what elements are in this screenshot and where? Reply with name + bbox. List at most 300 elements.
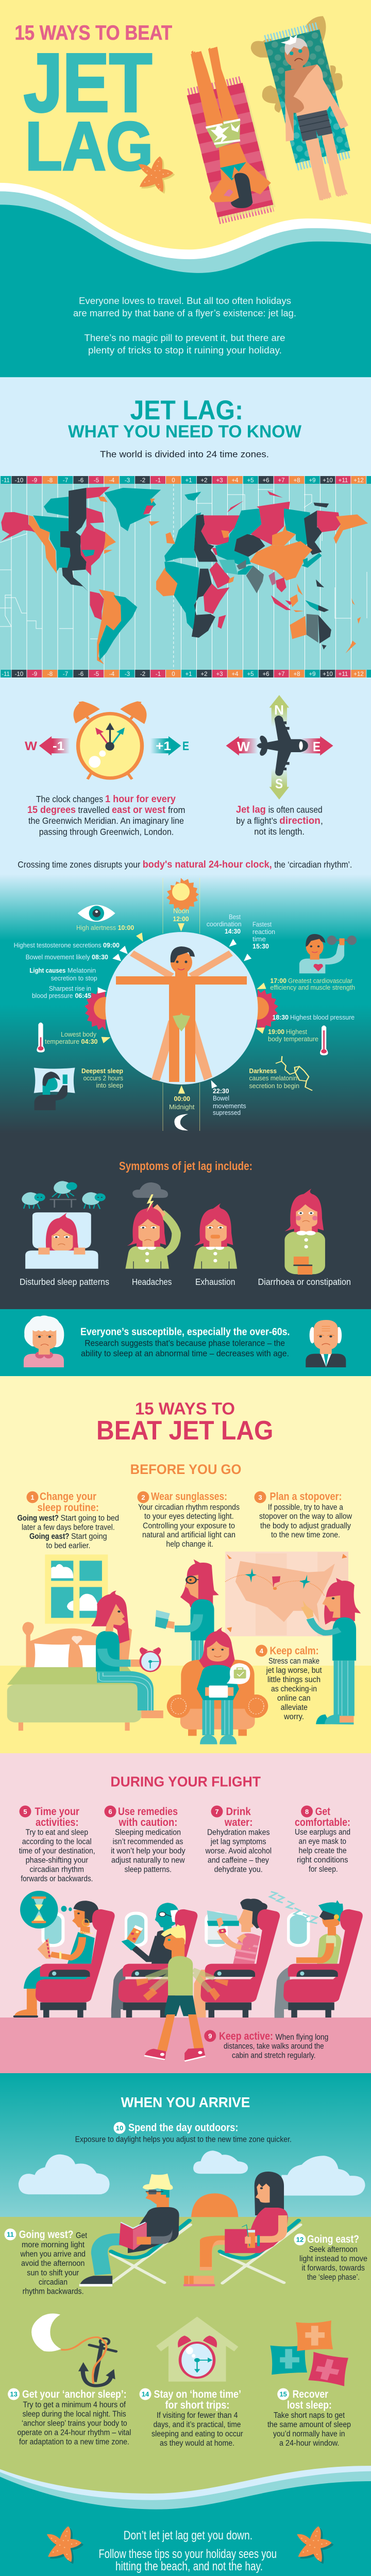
icon: moon xyxy=(174,1114,188,1130)
tip 7: jet lag symptoms xyxy=(210,1838,266,1846)
tip 15: the same amount of sleep xyxy=(267,2420,351,2429)
tip 5: time of your destination, xyxy=(19,1847,95,1856)
tip 12: the ‘sleep phase’. xyxy=(307,2273,360,2282)
figure: elderly woman xyxy=(24,1315,64,1367)
icon: noon sun xyxy=(166,878,199,931)
tip 15: Take short naps to get xyxy=(274,2411,345,2420)
time zone footer bar: -9 xyxy=(32,671,37,677)
heading: what you need to know: JET LAG: xyxy=(130,395,243,426)
diagram labels: causes melatonin xyxy=(249,1075,297,1082)
text: clock changes: the Greenwich Meridian. An imaginary line xyxy=(28,816,184,826)
figure: woman in armchair xyxy=(167,1627,268,1744)
diagram labels: 10:00 xyxy=(118,924,134,931)
text: everyone's susceptible: Research suggests that’s because phase tolerance – the xyxy=(85,1339,285,1348)
icon: melatonin molecule xyxy=(276,1056,312,1091)
tip 7: Drink xyxy=(226,1806,251,1818)
tip 14: If visiting for fewer than 4 xyxy=(157,2411,238,2420)
tip 15: Recover xyxy=(293,2388,328,2400)
tip 3: Plan a stopover: xyxy=(270,1491,342,1503)
tip 1: Going east? xyxy=(29,1532,69,1541)
tip 12: Seek afternoon xyxy=(309,2245,358,2254)
text: clock changes: passing through Greenwich, London. xyxy=(39,826,174,837)
tip 5: phase-shifting your xyxy=(26,1856,88,1865)
time zone footer bar: +10 xyxy=(323,671,333,677)
man on teal towel with palm shadow xyxy=(251,16,350,200)
diagram labels: blood pressure xyxy=(32,992,73,999)
tip 2: Your circadian rhythm responds xyxy=(138,1503,240,1512)
tip 5: Time your xyxy=(35,1806,79,1818)
tip 13: for adaptation to a new time zone. xyxy=(19,2438,129,2447)
diagram labels: secretion to stop xyxy=(51,975,97,982)
diagram labels: 12:00 xyxy=(173,916,189,923)
diagram labels: Light causes xyxy=(29,967,65,974)
tip 2: to your eyes detecting light. xyxy=(144,1512,234,1521)
diagram labels: 09:00 xyxy=(103,942,120,949)
time zone header bar: -2 xyxy=(140,478,145,484)
diagram labels: 19:00 xyxy=(268,1028,284,1036)
icon: plane with compass arrows: S xyxy=(275,776,283,791)
icon: alarm clock with west and east arrows xyxy=(25,701,189,780)
icon: alarm clock with west and east arrows: W xyxy=(25,739,37,753)
tip 6: it won’t help your body xyxy=(111,1847,185,1856)
diagram labels: Melatonin xyxy=(68,967,96,974)
icon: plane with compass arrows: N xyxy=(274,702,284,718)
symptom labels: Diarrhoea or constipation xyxy=(258,1277,351,1287)
window xyxy=(45,1554,108,1624)
figure: man reading xyxy=(79,2174,179,2286)
diagram labels: Deepest sleep xyxy=(81,1067,123,1075)
title: 15 WAYS TO BEAT xyxy=(14,22,172,44)
bed xyxy=(7,1622,142,1731)
text: circadian rhythm: Crossing time zones disrupts your xyxy=(18,859,140,870)
tip 14: 14 xyxy=(142,2391,149,2398)
text: clock changes: 1 hour for every xyxy=(105,793,176,805)
loungers xyxy=(111,2221,300,2283)
tip 7: 7 xyxy=(215,1808,219,1816)
tip 3: to the new time zone. xyxy=(271,1531,340,1539)
heading: 15 ways xyxy=(96,1399,273,1446)
tip 12 xyxy=(294,2233,367,2282)
diagram labels: 15:30 xyxy=(252,943,269,950)
diagram labels: temperature xyxy=(45,1038,79,1045)
tip 9 xyxy=(204,2030,328,2060)
time zone footer bar: +5 xyxy=(247,671,254,677)
tip 5: Try to eat and sleep xyxy=(26,1828,88,1837)
tip 1: Start going to bed xyxy=(61,1514,119,1523)
tip 5: circadian rhythm xyxy=(29,1866,84,1874)
text: everyone's susceptible: Everyone’s susceptible, especially the over-60s. xyxy=(80,1327,290,1338)
diagram labels: Noon xyxy=(173,908,189,915)
icon: starfish left xyxy=(47,2527,83,2564)
tip 9: Keep active: xyxy=(219,2030,273,2042)
tip 14: days, and it’s practical, time xyxy=(154,2420,241,2429)
wall map xyxy=(225,1552,348,1636)
woman on pink towel xyxy=(187,47,276,221)
tip 1: to bed earlier. xyxy=(46,1541,90,1550)
diagram labels: Bowel xyxy=(213,1095,229,1102)
tip 1: sleep routine: xyxy=(37,1502,99,1514)
tip 12: Going east? xyxy=(307,2233,359,2245)
text: jet lag direction: direction xyxy=(279,815,321,826)
diagram labels: 04:30 xyxy=(81,1038,98,1045)
text: clock changes: travelled xyxy=(78,805,109,815)
time zone lines xyxy=(0,484,367,670)
tip 4: little things such xyxy=(267,1675,321,1684)
big clock dial xyxy=(105,932,258,1084)
diagram labels: 06:45 xyxy=(75,992,91,999)
diagram labels: 18:30 xyxy=(272,1014,289,1021)
time zone header bar: +4 xyxy=(231,478,239,484)
time zone header bar: -3 xyxy=(125,478,130,484)
intro text: Everyone loves to travel. But all too often holidays xyxy=(79,296,291,306)
diagram labels: supressed xyxy=(213,1109,241,1116)
figure: woman with sunglasses xyxy=(155,1560,219,1663)
tip 6: isn’t recommended as xyxy=(113,1838,183,1846)
diagram labels: Darkness xyxy=(249,1067,277,1075)
tip 4: online can xyxy=(277,1694,310,1703)
continents: South America xyxy=(90,589,137,664)
intro text xyxy=(73,296,296,355)
tip 2: natural and artificial light can xyxy=(142,1531,235,1539)
tip 11: 11 xyxy=(7,2231,14,2238)
tip 5: forwards or backwards. xyxy=(21,1875,93,1884)
icon: eye xyxy=(78,905,115,922)
tip 5 xyxy=(19,1805,95,1884)
tip 9: When flying long xyxy=(275,2033,328,2042)
tip 2: Wear sunglasses: xyxy=(151,1491,227,1503)
tip 9: cabin and stretch regularly. xyxy=(232,2052,316,2060)
heading: what you need to know xyxy=(68,395,302,442)
time zone footer bar: +7 xyxy=(278,671,285,677)
tip 3: the body to adjust gradually xyxy=(260,1521,351,1530)
tip 8: right conditions xyxy=(297,1856,348,1865)
icon: thermometers xyxy=(37,1023,328,1055)
woman's flip flops xyxy=(183,2276,215,2286)
tip 12: it forwards, towards xyxy=(302,2264,365,2273)
diagram labels: coordination xyxy=(207,921,242,928)
tip 7: Dehydration makes xyxy=(207,1828,270,1837)
icon: starfish right xyxy=(297,2527,333,2564)
diagram labels: 00:00 xyxy=(174,1095,190,1103)
icon: plane with compass arrows: W xyxy=(237,739,250,754)
time zone header bar: -8 xyxy=(47,478,53,484)
tip 8: Use earplugs and xyxy=(295,1828,350,1837)
tip 11: when you arrive and xyxy=(20,2250,86,2259)
tip 2: 2 xyxy=(141,1494,145,1501)
tip 6: 6 xyxy=(108,1808,112,1816)
time zone footer bar: -7 xyxy=(63,671,68,677)
text: jet lag direction: by a flight’s xyxy=(236,816,277,826)
diagram labels: occurs 2 hours xyxy=(83,1075,123,1082)
time zone footer bar: +9 xyxy=(309,671,316,677)
tip 5: 5 xyxy=(23,1808,27,1816)
tip 3: stopover on the way to allow xyxy=(259,1512,352,1521)
time zone header bar: -6 xyxy=(78,478,83,484)
diagram labels: body temperature xyxy=(268,1036,318,1043)
tip 15: a 24-hour window. xyxy=(279,2439,339,2448)
figure: elderly man xyxy=(306,1320,346,1367)
text: jet lag direction: is often caused xyxy=(268,805,323,815)
diagram labels: Highest blood pressure xyxy=(290,1014,355,1021)
airline seats xyxy=(36,1909,363,2018)
heading: what you need to know: WHAT YOU NEED TO KNOW xyxy=(68,422,302,442)
text: circadian rhythm: body's natural 24-hour clock, xyxy=(143,859,272,870)
diagram labels: Midnight xyxy=(169,1104,195,1111)
intro text: There’s no magic pill to prevent it, but there are xyxy=(85,333,285,343)
tip 8: help create the xyxy=(299,1846,347,1855)
diagram labels: Fastest xyxy=(252,921,272,928)
time zone footer bar: -10 xyxy=(15,671,23,677)
time zone header bar: 0 xyxy=(172,478,175,484)
tip 7: worse. Avoid alcohol xyxy=(205,1847,272,1856)
tip 10: Spend the day outdoors: xyxy=(128,2122,238,2134)
intro text: are marred by that bane of a flyer’s existence: jet lag. xyxy=(73,308,296,318)
figure: sleeping man with eye mask xyxy=(269,1892,343,1964)
diagram labels: reaction xyxy=(252,928,275,936)
time zone footer bar: -5 xyxy=(94,671,99,677)
diagram labels: High alertness xyxy=(76,924,116,931)
illustration: arrival icons xyxy=(0,2276,371,2524)
text: everyone's susceptible: ability to sleep at an abnormal time – decreases with age. xyxy=(81,1349,289,1359)
diagram labels: 22:30 xyxy=(213,1088,229,1095)
time zone header bar: -4 xyxy=(109,478,115,484)
tip 13: Try to get a minimum 4 hours of xyxy=(23,2401,126,2410)
icon: alarm clock with west and east arrows: -1 xyxy=(53,739,64,753)
figure: old man with pills xyxy=(122,1903,179,1964)
tip 1: Start going xyxy=(71,1532,107,1541)
tip 2: help change it. xyxy=(166,1540,213,1549)
symptom labels: Headaches xyxy=(132,1277,172,1287)
time zone footer bar xyxy=(1,670,371,677)
tip 11: Going west? xyxy=(19,2229,73,2241)
tip 14 xyxy=(139,2388,243,2448)
icon: sheep counting xyxy=(22,1181,106,1209)
diagram labels: Lowest body xyxy=(61,1031,97,1038)
tip 11: Get xyxy=(76,2231,88,2240)
continents: Africa and Arabia xyxy=(156,562,234,638)
title xyxy=(14,22,172,184)
time zone footer bar: +12 xyxy=(353,671,364,677)
time zone header bar xyxy=(1,476,371,484)
world time zone map xyxy=(0,484,371,670)
tip 13: 13 xyxy=(10,2391,18,2398)
continents: Europe and Asia xyxy=(164,491,368,612)
time zone header bar: +12 xyxy=(353,478,364,484)
heading: 15 ways: BEAT JET LAG xyxy=(96,1416,273,1446)
clouds xyxy=(19,2150,365,2196)
tip 15: you’d normally have in xyxy=(273,2430,345,2438)
time zone footer bar: -4 xyxy=(109,671,115,677)
figure: woman drinking water xyxy=(207,1899,267,1964)
tip 8 xyxy=(295,1805,350,1874)
time zone footer bar: 0 xyxy=(172,671,175,677)
figure: exhausted woman xyxy=(194,1204,237,1269)
tip 9: distances, take walks around the xyxy=(224,2042,324,2051)
tip 3 xyxy=(255,1491,352,1539)
tip 8: Get xyxy=(315,1806,330,1818)
figure: vitruvian man xyxy=(116,946,247,1082)
tip 14: Stay on ‘home time’ xyxy=(154,2388,241,2400)
icon: alarm clock with west and east arrows: +1 xyxy=(156,739,171,753)
text: jet lag direction xyxy=(236,804,323,837)
panel: beach hero xyxy=(0,16,371,377)
tip 15: lost sleep: xyxy=(287,2399,332,2411)
tip 2 xyxy=(137,1491,240,1549)
text: world divided: The world is divided into 24 time zones. xyxy=(100,449,269,460)
diagram labels: time xyxy=(252,936,266,943)
tip 10: Exposure to daylight helps you adjust to the new time zone quicker. xyxy=(75,2136,292,2144)
symptom labels: Exhaustion xyxy=(195,1277,235,1287)
wave xyxy=(0,2466,371,2524)
title: LAG xyxy=(25,108,153,184)
title: JET xyxy=(24,37,152,129)
tip 12: 12 xyxy=(296,2236,303,2243)
time zone footer bar: -1 xyxy=(156,671,161,677)
tip 6: adjust naturally to new xyxy=(111,1856,185,1865)
time zone footer bar: +6 xyxy=(262,671,269,677)
diagram labels: efficiency and muscle strength xyxy=(270,984,355,991)
time zone footer bar: +4 xyxy=(231,671,239,677)
heading: 15 ways: 15 WAYS TO xyxy=(135,1399,235,1418)
tip 6: Use remedies xyxy=(118,1806,178,1818)
time zone header bar: -10 xyxy=(15,478,23,484)
heading: during your flight: DURING YOUR FLIGHT xyxy=(110,1774,261,1790)
diagram labels: movements xyxy=(213,1103,246,1110)
tip 4: 4 xyxy=(260,1647,264,1655)
icon: pillows xyxy=(270,2320,348,2386)
time zone footer bar: +1 xyxy=(185,671,192,677)
tip 13: Get your ‘anchor sleep’: xyxy=(22,2388,127,2400)
time zone header bar: +3 xyxy=(216,478,223,484)
tip 7 xyxy=(205,1805,272,1874)
tip 4 xyxy=(256,1645,322,1721)
figure: disturbed sleep woman xyxy=(25,1212,98,1269)
time zone header bar: +10 xyxy=(323,478,333,484)
tip 5: activities: xyxy=(36,1817,78,1828)
tip 8: 8 xyxy=(305,1808,309,1816)
tip 11: sun to shift your xyxy=(27,2269,79,2278)
figure: headache woman xyxy=(125,1182,176,1269)
time zone header bar: +6 xyxy=(262,478,269,484)
diagram labels: Best xyxy=(229,913,241,921)
text: clock changes: 15 degrees xyxy=(27,804,76,816)
time zone footer bar: +2 xyxy=(200,671,208,677)
rear legs xyxy=(111,1967,290,2018)
plane windows xyxy=(41,1912,310,1947)
tip 7: water: xyxy=(224,1817,252,1828)
diagram labels: into sleep xyxy=(96,1082,123,1089)
time zone header bar: -9 xyxy=(32,478,37,484)
tip 8: an eye mask to xyxy=(299,1837,346,1846)
text: circadian rhythm xyxy=(18,859,352,870)
symptom labels xyxy=(20,1277,351,1287)
closing message: Follow these tips so your holiday sees you xyxy=(99,2547,277,2561)
time zone footer bar: -11 xyxy=(2,671,10,677)
tip 15 xyxy=(267,2388,351,2448)
diagram labels: Sharpest rise in xyxy=(49,985,91,992)
waves xyxy=(0,183,371,377)
time zone header bar: +7 xyxy=(278,478,285,484)
text: jet lag direction: Jet lag xyxy=(236,804,266,816)
icon: strong man with dumbbell xyxy=(299,934,357,973)
tip 10 xyxy=(75,2122,292,2144)
tip 1: Change your xyxy=(40,1491,96,1503)
tip 14: as they would at home. xyxy=(160,2439,234,2448)
tip 15: 15 xyxy=(279,2391,287,2398)
diagram labels: Greatest cardiovascular xyxy=(288,977,352,985)
diagram labels xyxy=(14,908,355,1116)
tip 4: worry. xyxy=(283,1713,304,1721)
figure: woman pointing at map xyxy=(301,1578,361,1724)
tip 4: Stress can make xyxy=(268,1657,319,1666)
time markers xyxy=(112,933,251,961)
tip 7: dehydrate you. xyxy=(214,1866,263,1874)
text: jet lag direction: , xyxy=(321,816,323,826)
tip 13: operate on a 24-hour rhythm – vital xyxy=(18,2429,131,2437)
tip 8: for sleep. xyxy=(309,1865,338,1874)
tip 1: Going west? xyxy=(18,1514,59,1523)
tip 6: sleep patterns. xyxy=(125,1866,172,1874)
time zone header bar: -7 xyxy=(63,478,68,484)
tip 1 xyxy=(18,1491,119,1550)
tip 2: Controlling your exposure to xyxy=(143,1521,235,1530)
closing message xyxy=(99,2529,277,2573)
diagram labels: 08:30 xyxy=(92,954,108,961)
vertical guide lines xyxy=(163,878,200,1131)
heading: before you go: BEFORE YOU GO xyxy=(130,1462,241,1477)
time zone header bar: -1 xyxy=(156,478,161,484)
tip 6: Sleeping medication xyxy=(115,1828,181,1837)
tip 5: according to the local xyxy=(22,1838,92,1846)
tip 3: 3 xyxy=(258,1494,262,1501)
tip 10: 10 xyxy=(116,2124,123,2132)
diagram labels: secretion to begin xyxy=(249,1082,299,1090)
icon: alarm clock with west and east arrows: E xyxy=(182,739,189,753)
tip 8: comfortable: xyxy=(295,1817,350,1828)
starfish xyxy=(139,157,175,194)
tip 13: ‘anchor sleep’ trains your body to xyxy=(22,2419,127,2428)
illustration: aircraft cabin xyxy=(13,1891,363,2062)
tip 4: alleviate xyxy=(281,1703,308,1712)
figure: passenger walking in aisle xyxy=(136,1924,228,2062)
tip 11: rhythm backwards. xyxy=(23,2287,84,2296)
illustration: outdoors scene xyxy=(19,2150,365,2286)
figure: woman with drink xyxy=(200,2172,288,2270)
heading: symptoms: Symptoms of jet lag include: xyxy=(119,1159,252,1173)
tip 12: light instead to move xyxy=(299,2255,367,2263)
tip 6 xyxy=(104,1805,185,1874)
diagram labels: 14:30 xyxy=(225,928,241,935)
time zone footer bar: -3 xyxy=(125,671,130,677)
time zone header bar: +8 xyxy=(293,478,300,484)
time zone footer bar: -2 xyxy=(140,671,145,677)
tip 13: sleep during the local night. This xyxy=(23,2410,126,2419)
time zone header bar: -5 xyxy=(94,478,99,484)
icon: plane with compass arrows: E xyxy=(313,739,321,754)
tip 1: 1 xyxy=(30,1494,35,1501)
text: clock changes xyxy=(27,793,185,837)
icon: sun on horizon xyxy=(191,2193,238,2217)
diagram labels: Highest xyxy=(286,1028,308,1036)
tip 11 xyxy=(4,2229,88,2296)
figure: upset stomach woman xyxy=(284,1189,325,1275)
figure: woman eating sandwich xyxy=(13,1891,98,2018)
text: circadian rhythm: the ‘circadian rhythm’. xyxy=(274,859,352,870)
tip 14: for short trips: xyxy=(165,2399,229,2411)
tip 9: 9 xyxy=(208,2032,212,2040)
figure: woman sitting with clock xyxy=(91,1590,163,1718)
tip 3: If possible, try to have a xyxy=(268,1503,343,1512)
